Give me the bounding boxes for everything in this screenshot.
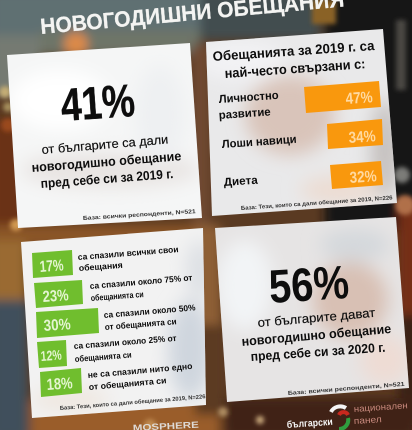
- row: personal development 47%: развитие: [218, 106, 271, 122]
- base note: База: Тези, които са дали обещание за 2019, N=226: [60, 393, 206, 412]
- logo: Български национален панел: национален: [353, 400, 408, 414]
- panel heading: най-често свързани с:: [224, 56, 366, 81]
- description: новогодишно обещание: [241, 321, 392, 349]
- row: 18% kept none: от обещанията си: [88, 375, 167, 392]
- panel: 56 percent give a promise for 2020: [215, 217, 410, 402]
- row: personal development 47%: Личностно: [218, 90, 279, 106]
- row: 18% kept none: [40, 361, 193, 397]
- row: 23% kept about 75%: 23%: [42, 287, 69, 306]
- logo: Български национален панел: панел: [353, 414, 382, 426]
- row: 17% kept all: са спазили всички свои: [77, 244, 179, 262]
- row: personal development 47%: [218, 81, 381, 122]
- row: bad habits 34%: 34%: [348, 128, 376, 147]
- row: 30% kept about 50%: [36, 302, 196, 338]
- row: 12% kept about 25%: са спазили около 25% от: [73, 333, 177, 351]
- base note: База: всички респонденти, N=521: [83, 209, 197, 222]
- row: diet 32%: 32%: [349, 168, 377, 187]
- row: 30% kept about 50%: 30%: [43, 316, 71, 335]
- description: пред себе си за 2019 г.: [40, 166, 174, 191]
- base note: База: Тези, които са дали обещание за 2019, N=226: [241, 194, 394, 212]
- row: 17% kept all: 17%: [39, 257, 64, 276]
- row: 17% kept all: [32, 244, 179, 278]
- description: от българите дават: [257, 306, 376, 330]
- row: 18% kept none: 18%: [46, 375, 73, 394]
- row: 30% kept about 50%: от обещанията си: [104, 316, 177, 332]
- big number: 41%: 41%: [59, 74, 137, 131]
- row: bad habits 34%: Лоши навици: [221, 134, 297, 151]
- description: [241, 306, 392, 364]
- row: 30% kept about 50%: са спазили около 50%: [103, 302, 196, 320]
- icon: tricolour ring: [331, 406, 348, 429]
- big number: 56%: 56%: [267, 255, 350, 313]
- description: новогодишно обещание: [31, 148, 182, 175]
- row: 23% kept about 75%: [34, 272, 193, 308]
- description: от българите са дали: [41, 132, 169, 157]
- description: [31, 132, 182, 191]
- row: 23% kept about 75%: са спазили около 75% от: [89, 272, 193, 291]
- panel: what promises relate to: [195, 29, 399, 216]
- row: 23% kept about 75%: обещанията си: [90, 289, 144, 303]
- row: bad habits 34%: [221, 119, 383, 151]
- description: пред себе си за 2020 г.: [250, 340, 386, 364]
- panel heading: Обещанията за 2019 г. са: [212, 38, 375, 64]
- row: 12% kept about 25%: обещанията си: [74, 350, 132, 364]
- row: 12% kept about 25%: 12%: [40, 347, 63, 364]
- panel: how promises were kept: [21, 228, 214, 418]
- row: 12% kept about 25%: [37, 333, 177, 368]
- row: 17% kept all: обещания: [78, 260, 123, 273]
- row: diet 32%: [223, 161, 383, 189]
- row: diet 32%: Диета: [223, 175, 259, 189]
- base note: База: всички респонденти, N=521: [288, 382, 406, 397]
- row: personal development 47%: 47%: [345, 89, 373, 108]
- panel heading: [212, 38, 375, 81]
- row: 18% kept none: не са спазили нито едно: [87, 361, 193, 380]
- logo: Български национален панел: [286, 400, 408, 430]
- panel: 41 percent made a promise: [7, 43, 202, 228]
